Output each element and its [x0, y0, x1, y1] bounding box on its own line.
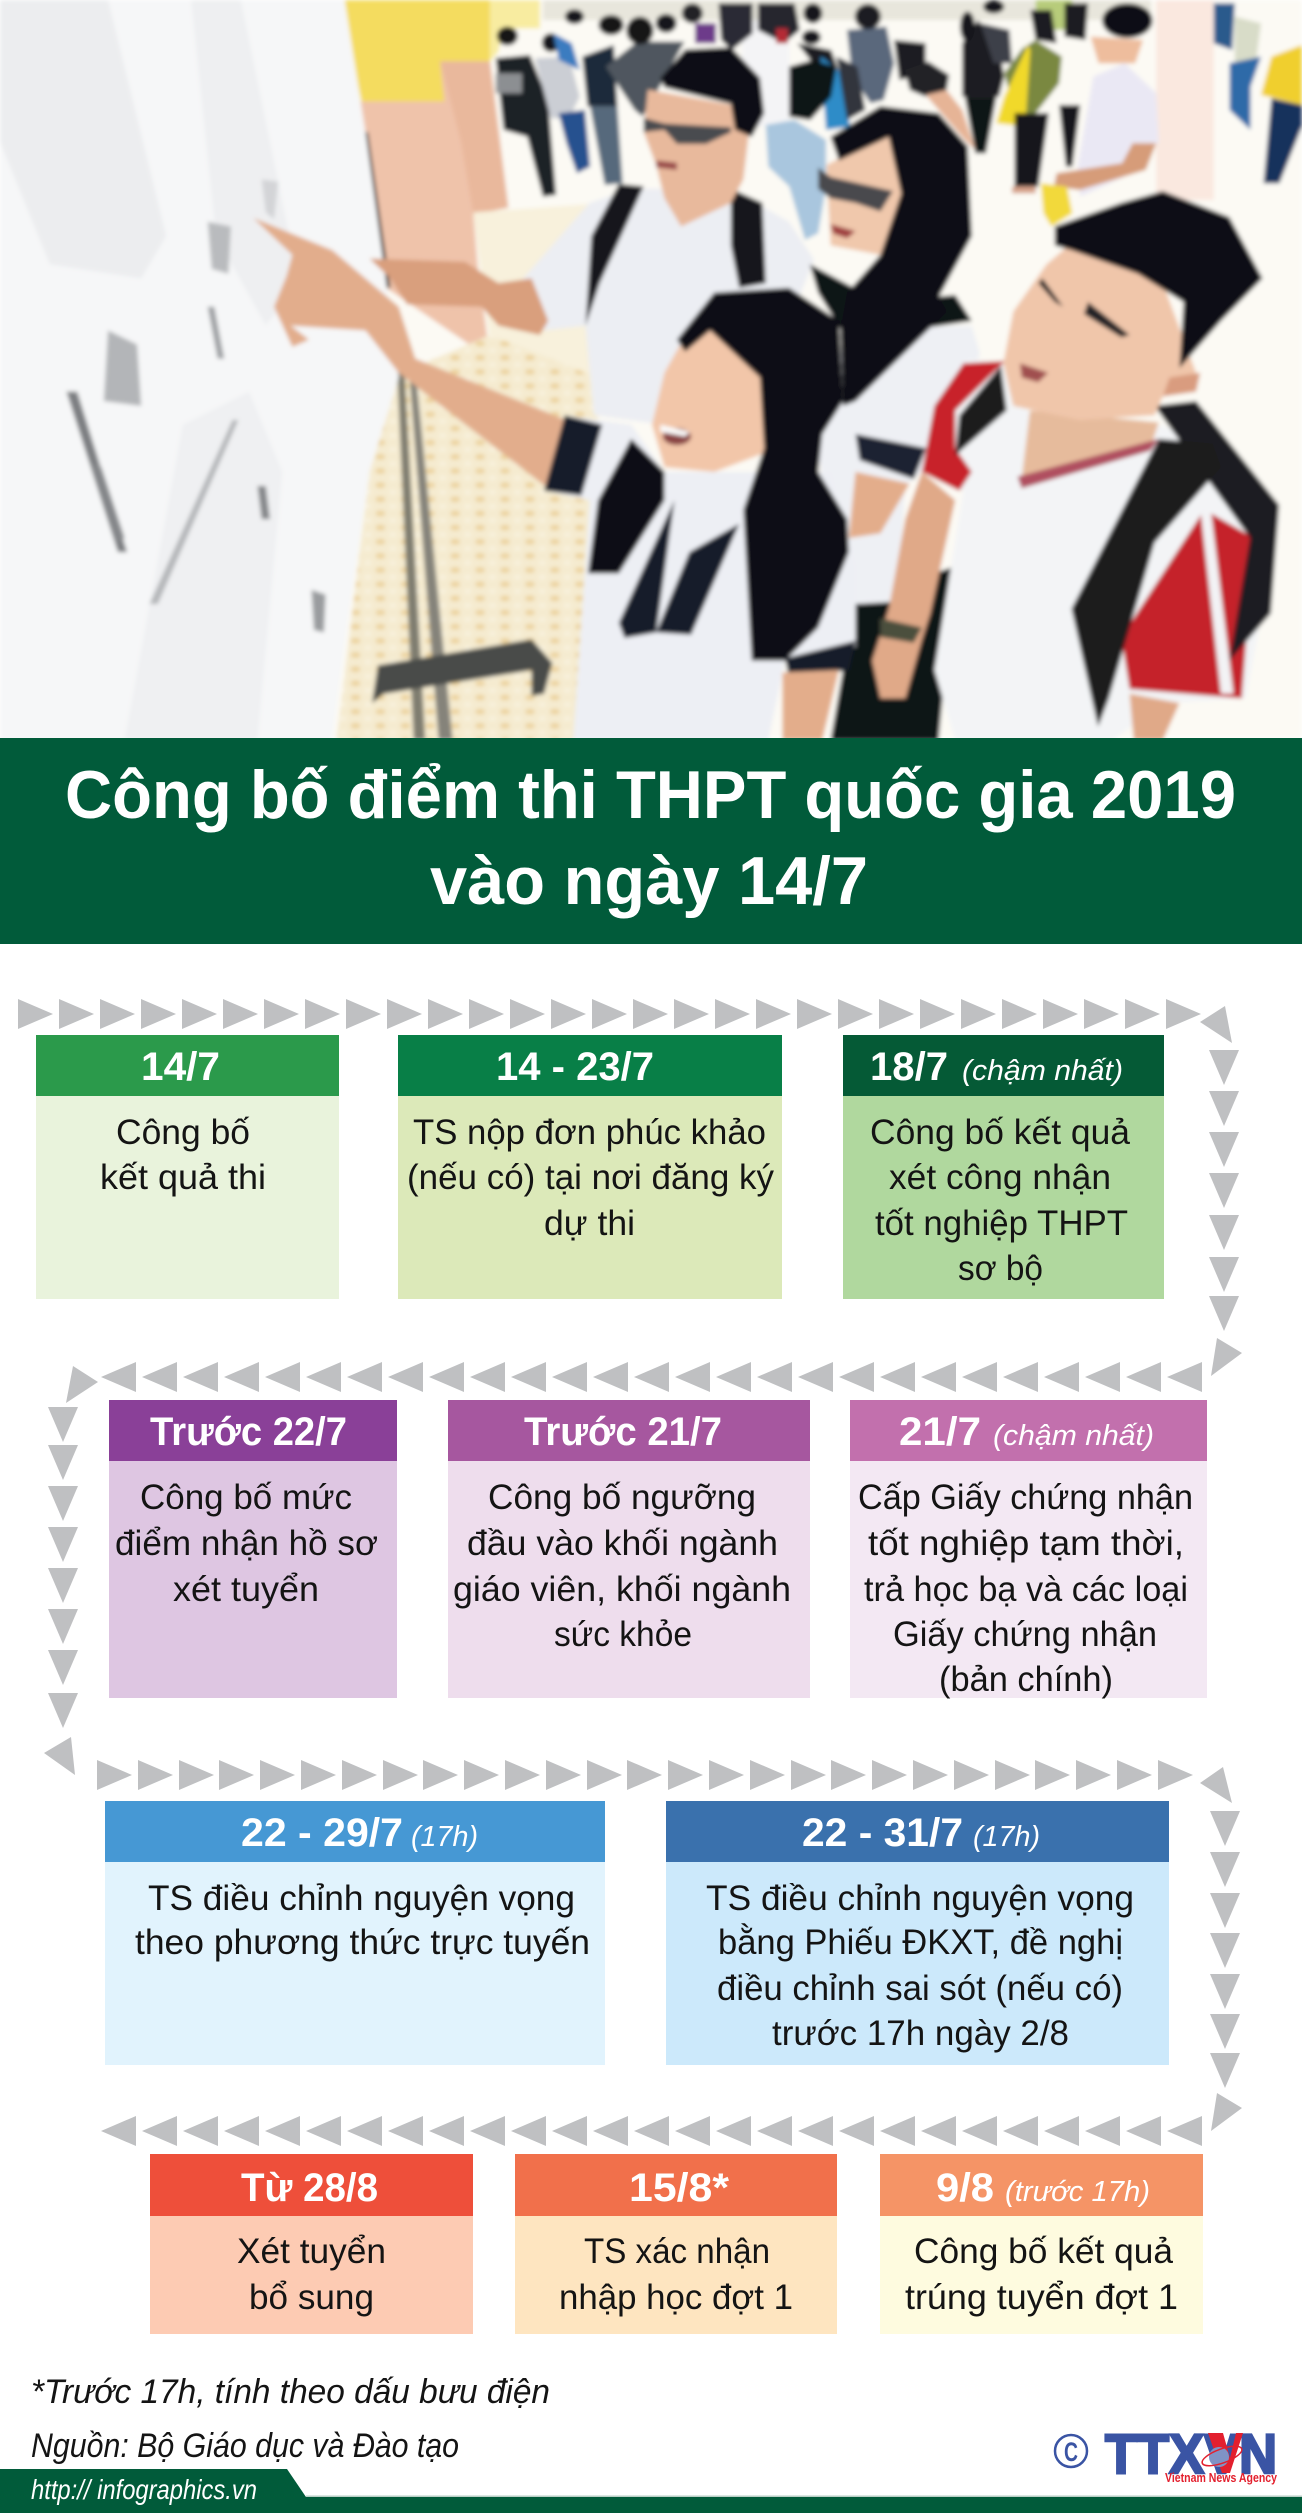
card header: 21/7 [899, 1410, 981, 1454]
title line 2: vào ngày 14/7 [430, 843, 868, 919]
card: Từ 28/8 [150, 2154, 473, 2334]
card header: 9/8 [936, 2166, 994, 2210]
arrow track row 3: left to right [97, 1760, 1193, 1790]
back boy with glasses [370, 47, 814, 425]
card body [448, 1461, 810, 1698]
card body: TS điều chỉnh nguyện vọng [148, 1879, 575, 1918]
middle girl with long hair [810, 106, 980, 740]
arrow track: left side going down to row 3 [44, 1366, 98, 1775]
wall and pillars [341, 0, 540, 359]
footnote: *Trước 17h, tính theo dấu bưu điện [31, 2373, 550, 2411]
card body: sơ bộ [958, 1249, 1043, 1288]
arrow track row 1: left to right [18, 999, 1201, 1029]
card header [666, 1801, 1169, 1862]
card header [109, 1400, 397, 1461]
card header: 14/7 [141, 1045, 220, 1089]
card: 15/8* [515, 2154, 837, 2334]
card body: trả học bạ và các loại [864, 1570, 1188, 1609]
copyright mark [1055, 2435, 1087, 2467]
card header: (17h) [411, 1821, 478, 1853]
card body: theo phương thức trực tuyến [135, 1923, 590, 1962]
hero photo: students pointing at exam results board [0, 0, 1302, 740]
card body [150, 2216, 473, 2334]
card body [36, 1096, 339, 1299]
source line: Nguồn: Bộ Giáo dục và Đào tạo [31, 2427, 459, 2465]
card body: (bản chính) [939, 1660, 1113, 1699]
card: 22 - 31/7 [666, 1801, 1169, 2065]
card body: Xét tuyển [237, 2232, 386, 2271]
copyright mark: C [1064, 2437, 1078, 2467]
card header: 18/7 [870, 1045, 948, 1089]
card body: TS điều chỉnh nguyện vọng [706, 1879, 1134, 1918]
card body: Giấy chứng nhận [893, 1615, 1157, 1654]
card body [850, 1461, 1207, 1699]
card body: nhập học đợt 1 [559, 2278, 793, 2317]
card header: 15/8* [629, 2166, 729, 2210]
card body: Công bố ngưỡng [488, 1478, 756, 1517]
card: Trước 22/7 [109, 1400, 397, 1698]
agency name: Vietnam News Agency [1165, 2470, 1278, 2485]
front girl [544, 288, 856, 740]
card header: (17h) [973, 1821, 1040, 1853]
card header: (trước 17h) [1005, 2176, 1150, 2208]
card: 9/8 [880, 2154, 1203, 2334]
card body: (nếu có) tại nơi đăng ký [407, 1158, 774, 1197]
card header: 14 - 23/7 [496, 1045, 654, 1089]
card body [666, 1862, 1169, 2065]
TTXVN wordmark: TTXVN [1105, 2422, 1277, 2485]
card header [398, 1035, 782, 1096]
crowd in background [496, 0, 1302, 240]
card header: (chậm nhất) [993, 1420, 1154, 1452]
card body [398, 1096, 782, 1299]
card body: điều chỉnh sai sót (nếu có) [717, 1969, 1123, 2008]
card header [850, 1400, 1207, 1461]
card body: dự thi [544, 1204, 635, 1243]
card header: Trước 22/7 [150, 1410, 347, 1454]
card body [880, 2216, 1203, 2334]
card body: tốt nghiệp THPT [875, 1204, 1128, 1243]
card body [843, 1096, 1164, 1299]
footer band with url [0, 2469, 1302, 2513]
card body: Công bố mức [140, 1478, 352, 1517]
card header: 22 - 29/7 [241, 1811, 403, 1855]
card header: Từ 28/8 [241, 2166, 378, 2210]
card body: TS xác nhận [584, 2232, 770, 2271]
card body: xét tuyển [173, 1570, 319, 1609]
card body: bổ sung [249, 2278, 374, 2317]
card body: Cấp Giấy chứng nhận [858, 1478, 1193, 1517]
card header [150, 2154, 473, 2216]
card header [880, 2154, 1203, 2216]
footer band with url: http:// infographics.vn [31, 2474, 257, 2505]
title banner [0, 738, 1302, 944]
card header: Trước 21/7 [524, 1410, 722, 1454]
card body: bằng Phiếu ĐKXT, đề nghị [718, 1923, 1123, 1962]
card body: Công bố [116, 1113, 250, 1152]
card body: xét công nhận [889, 1158, 1111, 1197]
card: 14/7 [36, 1035, 339, 1299]
card body [515, 2216, 837, 2334]
card body: tốt nghiệp tạm thời, [868, 1524, 1184, 1563]
card header: (chậm nhất) [962, 1055, 1123, 1087]
right boy with red and white jersey [872, 191, 1279, 740]
card header: 22 - 31/7 [802, 1811, 963, 1855]
card header [515, 2154, 837, 2216]
card body: sức khỏe [554, 1615, 692, 1654]
card: 14 - 23/7 [398, 1035, 782, 1299]
arrow track row 2: right to left [101, 1362, 1202, 1392]
card: 21/7 [850, 1400, 1207, 1699]
card body [109, 1461, 397, 1698]
card header [105, 1801, 605, 1862]
raised arm of front girl [253, 218, 577, 488]
card: 18/7 [843, 1035, 1164, 1299]
card body: trước 17h ngày 2/8 [772, 2014, 1069, 2053]
card body: Công bố kết quả [914, 2232, 1174, 2271]
card body: điểm nhận hồ sơ [115, 1524, 378, 1563]
paper stand poles [361, 132, 552, 740]
card body: giáo viên, khối ngành [453, 1570, 791, 1609]
card header [36, 1035, 339, 1096]
card body [105, 1862, 605, 2065]
card header [843, 1035, 1164, 1096]
logo: TTXVN Vietnam News Agency [1055, 2422, 1278, 2485]
card: 22 - 29/7 [105, 1801, 605, 2065]
arrow track: right side going down to row 2 [1200, 1006, 1242, 1376]
card: Trước 21/7 [448, 1400, 810, 1698]
card body: TS nộp đơn phúc khảo [413, 1113, 766, 1152]
card body: đầu vào khối ngành [467, 1524, 778, 1563]
card body: Công bố kết quả [870, 1113, 1131, 1152]
arrow track: right side going down to row 4 [1200, 1767, 1242, 2131]
results paper board [0, 0, 399, 740]
card header [448, 1400, 810, 1461]
arrow track row 4: right to left [101, 2116, 1202, 2146]
title line 1: Công bố điểm thi THPT quốc gia 2019 [65, 757, 1236, 833]
pale floor and tiled floor [336, 203, 606, 740]
card body: trúng tuyển đợt 1 [905, 2278, 1178, 2317]
card body: kết quả thi [100, 1158, 266, 1197]
